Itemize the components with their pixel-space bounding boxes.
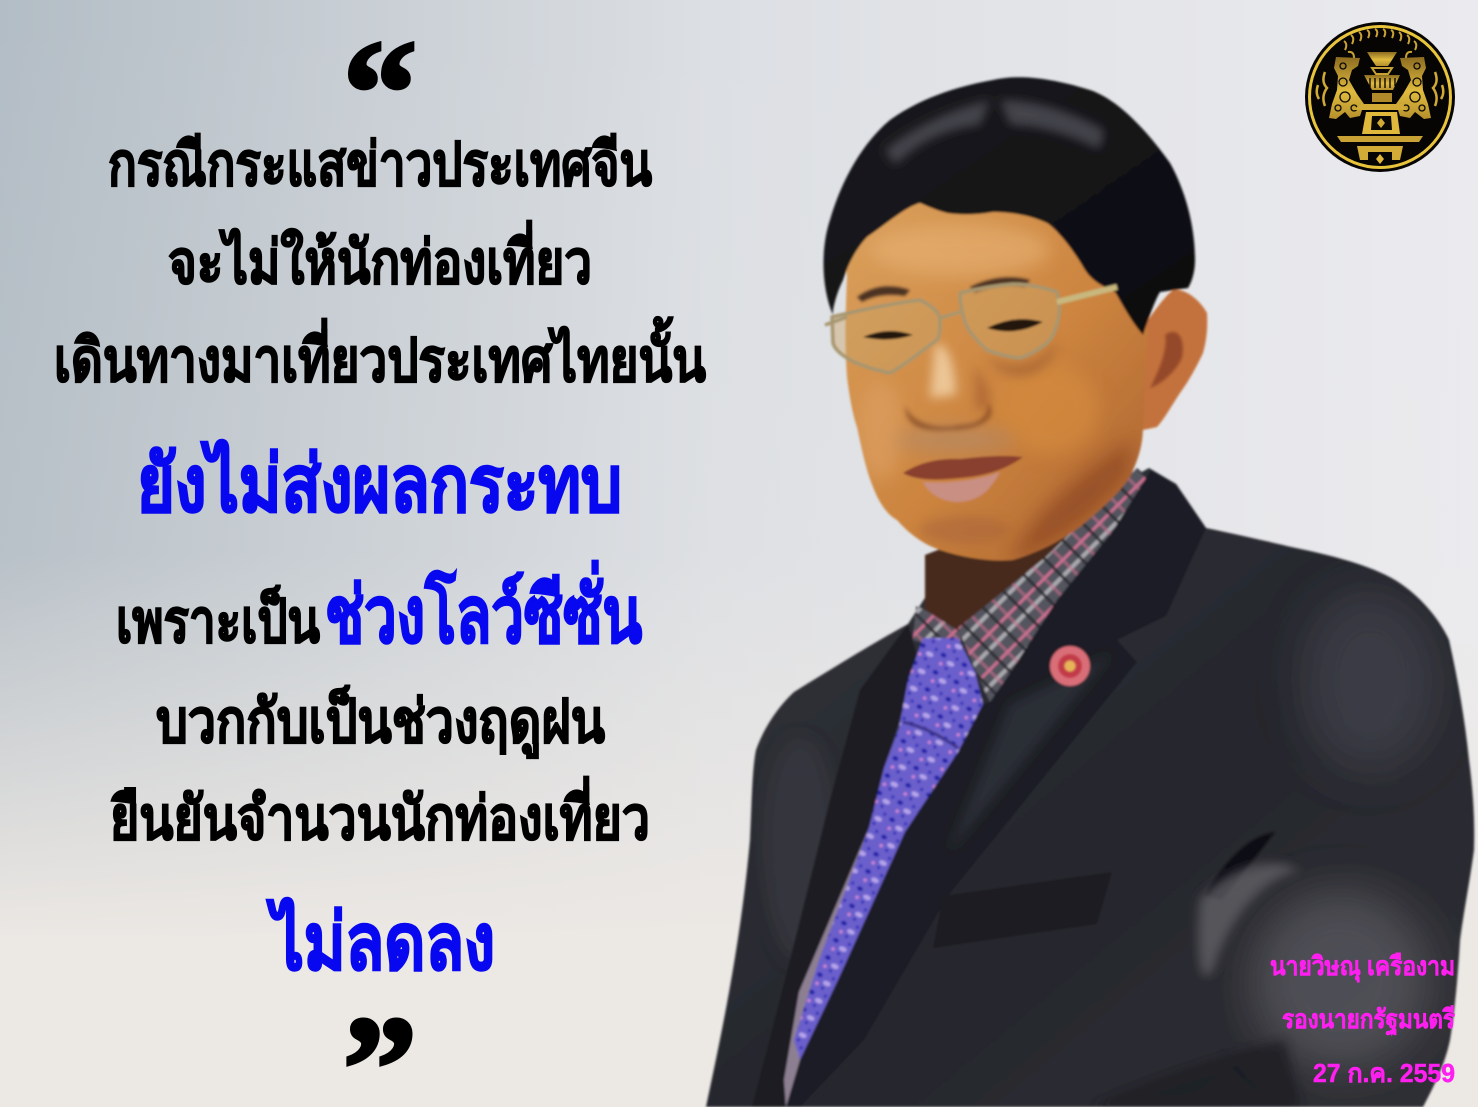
pocket [933,872,1112,948]
bowl [1364,52,1400,102]
portrait: man in dark suit [706,77,1474,1107]
flames [1344,29,1416,58]
left lion [1317,57,1364,119]
line 8 highlight: ไม่ลดลง [266,897,495,986]
lapel pin [1050,646,1090,686]
attribution [1270,951,1455,1088]
role: รองนายกรัฐมนตรี [1282,1004,1455,1037]
seal of the prime minister's office [1305,22,1455,172]
line 7: ยืนยันจำนวนนักท่องเที่ยว [110,776,650,852]
sleeve shading [765,590,1440,1107]
lapel sheen [950,655,1110,850]
inner ear [1150,332,1183,388]
shirt collar left [913,606,963,650]
line 1: กรณีกระแสข่าวประเทศจีน [108,131,652,198]
face shading [858,224,1130,562]
jacket body [706,468,1474,1107]
hair [824,77,1195,335]
tie knot crease [903,722,958,748]
glasses [825,284,1117,373]
date: 27 ก.ค. 2559 [1313,1058,1455,1088]
line 5 lead: เพราะเป็น [116,585,320,655]
eyes [863,319,1043,340]
left lapel [752,624,918,1107]
ear [1143,290,1207,430]
quote text [54,131,706,986]
hair shine [885,100,1105,165]
neck shadow [925,470,1140,632]
main lapel [786,470,1206,1107]
pedestal [1337,104,1423,164]
nose [905,344,992,430]
line 4 highlight: ยังไม่ส่งผลกระทบ [137,439,622,528]
eyebrows [857,277,1030,302]
line 5 highlight: ช่วงโลว์ซีซั่น [325,560,642,659]
line 3: เดินทางมาเที่ยวประเทศไทยนั้น [54,316,706,394]
mouth [903,456,1023,502]
tie [794,638,983,1060]
shirt collar right [958,468,1151,702]
name: นายวิษณุ เครืองาม [1270,951,1455,983]
face [843,195,1148,561]
shirt stripe beside tie [784,728,925,1107]
line 2: จะไม่ให้นักท่องเที่ยว [168,220,592,296]
right lion [1396,57,1443,119]
line 6: บวกกับเป็นช่วงฤดูฝน [156,685,605,759]
